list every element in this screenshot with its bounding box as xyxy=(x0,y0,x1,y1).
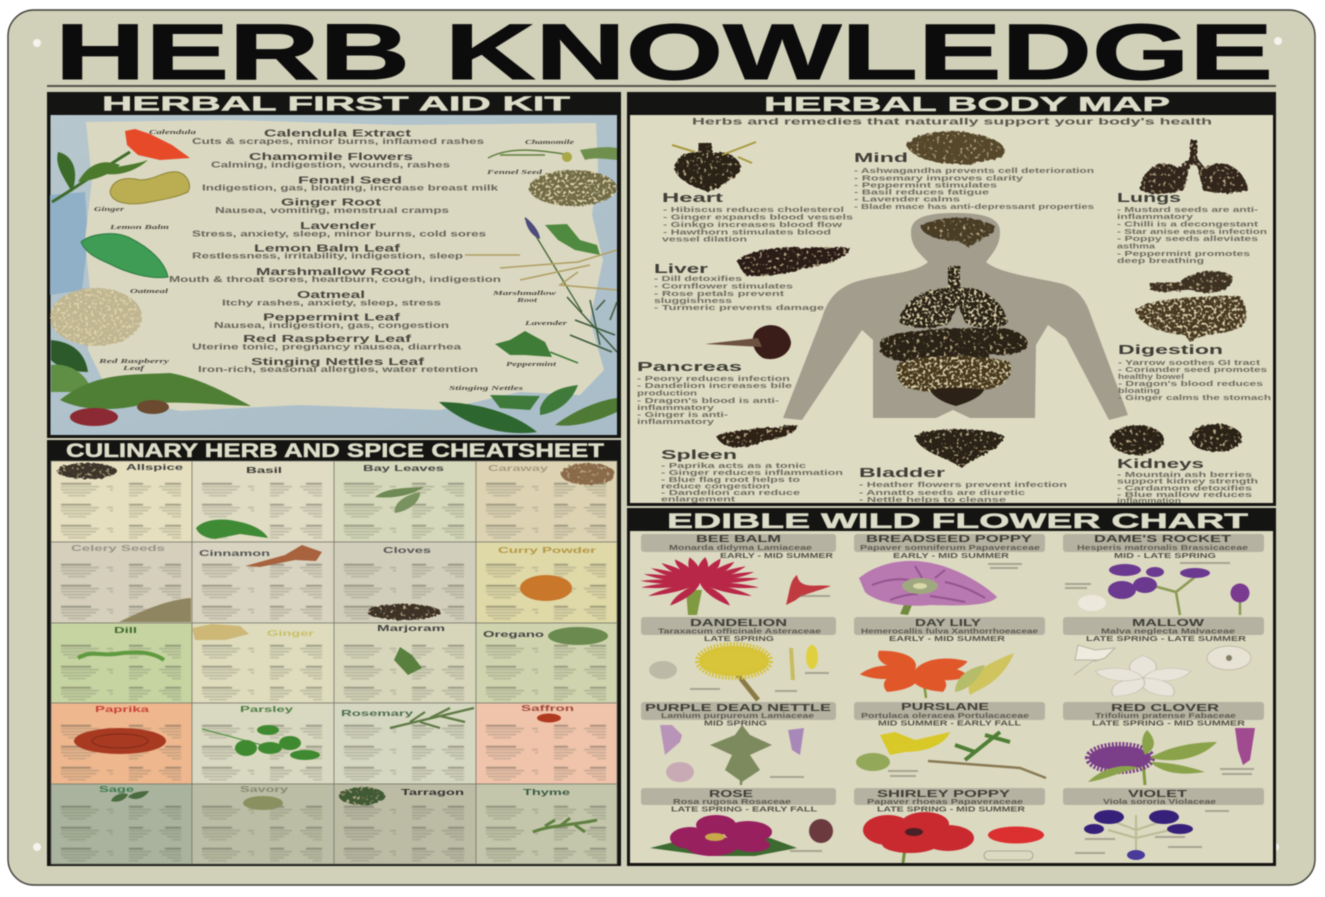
plant captions: Lavender xyxy=(523,321,568,327)
entry: lemon balm: Restlessness, irritability, indigestion, sleep xyxy=(192,252,463,260)
organ: lungs in torso xyxy=(899,266,1008,328)
entry: stinging nettles: Iron-rich, seasonal allergies, water retention xyxy=(198,365,478,374)
flower: shirley poppy: Papaver rhoeas Papaveraceae xyxy=(867,797,1023,806)
cell: cloves xyxy=(334,542,476,623)
plant captions: Lemon Balm xyxy=(108,225,170,231)
cell: oregano xyxy=(476,623,617,703)
text block: bladder: - Annatto seeds are diuretic xyxy=(859,488,1025,497)
cell: tarragon xyxy=(334,784,476,864)
text block: lungs: - Chilli is a decongestant xyxy=(1117,220,1259,228)
illustration: lemon balm leaf xyxy=(81,234,168,278)
flower: violet: VIOLET xyxy=(1128,789,1187,800)
cell: marjoram xyxy=(334,623,476,703)
entry: stinging nettles xyxy=(198,356,478,374)
text block: mind: - Peppermint stimulates xyxy=(854,180,997,190)
illustration: calendula xyxy=(52,129,190,202)
plant captions: Chamomile xyxy=(525,140,575,146)
title: HERB KNOWLEDGE xyxy=(55,7,1273,96)
flower: rose: ROSE xyxy=(709,789,754,800)
panel: culinary herb and spice cheatsheet xyxy=(47,440,621,866)
text block: liver: - Cornflower stimulates xyxy=(654,282,793,290)
entry: marshmallow: Marshmallow Root xyxy=(256,266,411,278)
cell: paprika: Paprika xyxy=(95,704,149,714)
herb list xyxy=(169,128,501,374)
text block: spleen: - Ginger reduces inflammation xyxy=(661,468,844,477)
cell: caraway: Caraway xyxy=(488,463,548,473)
entry: marshmallow: Mouth & throat sores, heartburn, cough, indigestion xyxy=(169,275,501,284)
text block: lungs: inflammatory xyxy=(1117,212,1194,221)
text block: heart: - Hibiscus reduces cholesterol xyxy=(663,205,844,214)
entry: ginger: Nausea, vomiting, menstrual cramps xyxy=(215,206,450,215)
text block: kidneys: support kidney strength xyxy=(1117,476,1259,486)
text block: pancreas: production xyxy=(637,388,698,398)
plant captions: Leaf xyxy=(121,366,146,372)
text block: spleen: - Blue flag root helps to xyxy=(661,475,801,484)
text block: digestion: - Dragon's blood reduces xyxy=(1118,379,1263,388)
entry: calendula xyxy=(192,128,485,146)
plant captions: Fennel Seed xyxy=(487,170,544,176)
organ: stomach, liver and spleen in torso xyxy=(880,328,1028,365)
illustration: stinging nettles xyxy=(439,385,617,433)
text block: digestion: bloating xyxy=(1118,386,1161,395)
text block: spleen: - Dandelion can reduce xyxy=(661,488,800,497)
flower: violet: Viola sororia Violaceae xyxy=(1103,797,1216,806)
flower: rose: LATE SPRING - EARLY FALL xyxy=(671,806,818,814)
text block: pancreas: Pancreas xyxy=(637,360,742,374)
flower: day lily xyxy=(854,617,1045,698)
plant captions: Oatmeal xyxy=(130,289,169,295)
cell: savory: Savory xyxy=(240,784,288,794)
mounting hole: top left xyxy=(33,39,41,47)
flower: purslane: PURSLANE xyxy=(901,702,990,713)
text block: spleen xyxy=(661,448,844,504)
subtitle: Herbs and remedies that naturally support your body's health xyxy=(692,116,1212,128)
flower: dame's rocket: MID - LATE SPRING xyxy=(1114,553,1217,560)
text block: digestion xyxy=(1118,343,1272,402)
entry: fennel: Fennel Seed xyxy=(298,174,402,186)
entry: peppermint xyxy=(214,312,449,330)
flower: dame's rocket: DAME'S ROCKET xyxy=(1094,534,1231,545)
flower: rose xyxy=(641,788,836,856)
heading: herbal body map: HERBAL BODY MAP xyxy=(764,94,1170,116)
panel: edible wild flower chart xyxy=(627,508,1276,866)
cell: rosemary: Rosemary xyxy=(341,708,413,718)
flower: red clover: RED CLOVER xyxy=(1111,703,1220,714)
flower: red clover: Trifolium pratense Fabaceae xyxy=(1095,711,1236,720)
entry: stinging nettles: Stinging Nettles Leaf xyxy=(251,356,425,368)
cell: savory xyxy=(192,784,334,864)
plant captions xyxy=(94,130,575,392)
flower: shirley poppy: SHIRLEY POPPY xyxy=(877,789,1011,800)
text block: mind: Mind xyxy=(854,151,908,165)
text block: heart: - Hawthorn stimulates blood xyxy=(663,228,832,236)
text block: bladder xyxy=(859,466,1068,504)
illustration: fennel seed xyxy=(529,170,617,206)
cell: marjoram: Marjoram xyxy=(377,623,446,633)
flower: breadseed poppy xyxy=(854,534,1045,615)
flower: dandelion: Taraxacum officinale Asteraceae xyxy=(658,626,821,636)
text block: lungs: asthma xyxy=(1117,242,1156,250)
heading: culinary cheatsheet: CULINARY HERB AND SPICE CHEATSHEET xyxy=(66,441,605,462)
flower: shirley poppy: LATE SPRING - MID SUMMER xyxy=(877,806,1025,814)
illustration: lavender and marshmallow root xyxy=(465,217,617,312)
cell: bay leaves: Bay Leaves xyxy=(363,463,444,473)
text block: lungs: deep breathing xyxy=(1117,256,1205,265)
flower: dandelion: LATE SPRING xyxy=(704,636,775,643)
mounting hole: bottom left xyxy=(33,843,41,851)
panel: herbal body map xyxy=(627,92,1276,506)
illustration: peppermint leaf xyxy=(495,331,578,363)
plant captions: Peppermint xyxy=(506,362,557,368)
flower: shirley poppy xyxy=(854,788,1045,863)
illustration: rosemary sprig xyxy=(567,297,617,352)
cell: saffron xyxy=(476,703,617,784)
entry: red raspberry: Uterine tonic, pregnancy nausea, diarrhea xyxy=(192,342,462,352)
plant captions: Stinging Nettles xyxy=(449,386,524,392)
entry: fennel: Indigestion, gas, bloating, increase breast milk xyxy=(202,184,499,192)
flower: mallow: LATE SPRING - LATE SUMMER xyxy=(1086,636,1246,643)
flower: red clover xyxy=(1063,702,1264,785)
entry: lavender: Lavender xyxy=(300,220,376,232)
flower: breadseed poppy: EARLY - MID SUMMER xyxy=(893,553,1009,560)
parchment xyxy=(85,120,604,411)
cell: allspice xyxy=(51,461,192,542)
entry: marshmallow xyxy=(169,266,501,284)
text block: digestion: Digestion xyxy=(1118,343,1223,357)
blue watercolor edge xyxy=(50,192,88,295)
text block: digestion: - Coriander seed promotes xyxy=(1118,365,1267,374)
text block: spleen: reduce congestion xyxy=(661,482,771,490)
cell: paprika xyxy=(51,703,192,784)
cell: allspice: Allspice xyxy=(126,462,183,472)
entry: lavender: Stress, anxiety, sleep, minor burns, cold sores xyxy=(192,230,487,238)
flower: rose: Rosa rugosa Rosaceae xyxy=(673,797,791,806)
text block: pancreas: inflammatory xyxy=(637,417,715,426)
text block: bladder: - Heather flowers prevent infection xyxy=(859,480,1068,489)
flower: day lily: DAY LILY xyxy=(915,618,981,629)
organ: spleen xyxy=(716,425,798,447)
illustration: ginger root xyxy=(110,172,190,204)
cell: basil xyxy=(192,461,334,542)
flower: bee balm xyxy=(640,534,836,615)
entry: lemon balm xyxy=(192,242,463,260)
cell: cloves: Cloves xyxy=(383,545,431,555)
plant captions: Marshmallow xyxy=(491,291,558,297)
text block: liver: - Dill detoxifies xyxy=(654,274,742,283)
text block: kidneys: - Mountain ash berries xyxy=(1117,470,1252,479)
flower: mallow xyxy=(1063,617,1264,700)
entry: ginger xyxy=(215,196,450,215)
flower: purple dead nettle: PURPLE DEAD NETTLE xyxy=(645,703,832,714)
illustration: raspberry leaves xyxy=(51,340,251,426)
organ: kidneys xyxy=(1110,424,1242,455)
flower: dame's rocket: Hesperis matronalis Brassicaceae xyxy=(1077,543,1248,552)
text block: liver xyxy=(654,262,824,312)
text block: liver: - Turmeric prevents damage xyxy=(654,303,824,312)
cell: cinnamon xyxy=(192,542,334,623)
organ: bladder xyxy=(915,429,1004,468)
entry: chamomile: Calming, indigestion, wounds, rashes xyxy=(211,160,451,170)
text block: bladder: Bladder xyxy=(859,466,945,480)
text block: mind xyxy=(854,151,1095,211)
text block: mind: - Lavender calms xyxy=(854,194,960,204)
text block: pancreas: - Dragon's blood is anti- xyxy=(637,396,780,405)
text block: pancreas: inflammatory xyxy=(637,403,715,412)
organ: bladder in torso xyxy=(930,388,984,406)
organ: mind brain xyxy=(906,131,1005,165)
text block: heart: - Ginger expands blood vessels xyxy=(663,212,853,222)
mounting hole: top right xyxy=(1274,37,1282,45)
text block: liver: sluggishness xyxy=(654,296,732,305)
text block: lungs: - Poppy seeds alleviates xyxy=(1117,234,1258,243)
text block: kidneys: - Blue mallow reduces xyxy=(1117,490,1252,499)
text block: heart: vessel dilation xyxy=(662,234,748,244)
organ: lungs xyxy=(1140,140,1248,194)
cell: sage: Sage xyxy=(99,784,134,794)
text block: pancreas: - Dandelion increases bile xyxy=(637,381,792,390)
flower: mallow: MALLOW xyxy=(1132,618,1205,629)
flower: purple dead nettle: MID SPRING xyxy=(704,720,768,728)
text block: mind: - Blade mace has anti-depressant properties xyxy=(854,202,1094,211)
text block: pancreas: - Peony reduces infection xyxy=(637,374,791,383)
text block: lungs: - Peppermint promotes xyxy=(1117,249,1250,258)
cell: dill: Dill xyxy=(114,625,137,635)
text block: kidneys: - Cardamom detoxifies xyxy=(1117,484,1252,492)
heading: edible wild flower chart: EDIBLE WILD FLOWER CHART xyxy=(667,510,1248,533)
entry: fennel xyxy=(202,174,499,192)
entry: red raspberry: Red Raspberry Leaf xyxy=(243,333,412,345)
plant captions: Calendula xyxy=(149,130,196,136)
flower: dandelion xyxy=(641,617,836,700)
flower: purslane: Portulaca oleracea Portulacaceae xyxy=(861,711,1029,720)
cell: saffron: Saffron xyxy=(521,703,574,713)
entry: peppermint: Peppermint Leaf xyxy=(263,312,401,324)
text block: lungs: Lungs xyxy=(1117,191,1181,205)
cell: celery seeds: Celery Seeds xyxy=(71,543,165,553)
text block: bladder: - Nettle helps to cleanse xyxy=(859,495,1006,504)
cell: parsley: Parsley xyxy=(240,704,293,714)
plant captions: Red Raspberry xyxy=(97,359,170,365)
mounting hole: bottom right xyxy=(1271,843,1279,851)
text block: digestion: - Ginger calms the stomach xyxy=(1118,393,1272,402)
entry: calendula: Cuts & scrapes, minor burns, inflamed rashes xyxy=(192,137,485,146)
text block: liver: Liver xyxy=(654,262,708,276)
plant captions: Ginger xyxy=(94,207,125,213)
text block: pancreas xyxy=(637,360,792,426)
cell: cinnamon: Cinnamon xyxy=(199,548,270,558)
text block: spleen: - Paprika acts as a tonic xyxy=(661,461,806,470)
cell: tarragon: Tarragon xyxy=(401,787,464,797)
text block: liver: - Rose petals prevent xyxy=(654,289,785,298)
cell: rosemary xyxy=(334,703,476,784)
organ: digestion xyxy=(1135,271,1246,342)
title rule xyxy=(47,85,1276,87)
entry: peppermint: Nausea, indigestion, gas, congestion xyxy=(214,321,449,330)
entry: red raspberry xyxy=(192,333,462,352)
flower: purple dead nettle: Lamium purpureum Lamiaceae xyxy=(661,711,814,720)
text block: heart: - Ginkgo increases blood flow xyxy=(663,220,842,229)
entry: chamomile: Chamomile Flowers xyxy=(249,151,413,163)
text block: lungs xyxy=(1117,191,1268,265)
flower: breadseed poppy: Papaver somniferum Papaveraceae xyxy=(860,543,1040,552)
cell: bay leaves xyxy=(334,461,476,542)
text block: mind: - Rosemary improves clarity xyxy=(854,174,1024,182)
text block: heart xyxy=(662,191,853,244)
cell: parsley xyxy=(192,703,334,784)
flower: mallow: Malva neglecta Malvaceae xyxy=(1101,626,1235,636)
illustration: oatmeal xyxy=(50,288,142,346)
entry: lemon balm: Lemon Balm Leaf xyxy=(254,242,401,254)
text block: lungs: - Mustard seeds are anti- xyxy=(1117,205,1259,214)
cell: oregano: Oregano xyxy=(483,629,544,639)
flower: bee balm: EARLY - MID SUMMER xyxy=(720,553,833,560)
text block: digestion: - Yarrow soothes GI tract xyxy=(1118,358,1261,367)
entry: ginger: Ginger Root xyxy=(281,196,382,208)
text block: kidneys: Kidneys xyxy=(1117,457,1204,471)
cell: ginger xyxy=(192,623,334,703)
text block: pancreas: - Ginger is anti- xyxy=(637,410,729,419)
text block: lungs: - Star anise eases infection xyxy=(1117,227,1268,236)
cell: thyme: Thyme xyxy=(523,787,570,797)
text block: mind: - Ashwagandha prevents cell deterioration xyxy=(854,166,1095,175)
flower: purple dead nettle xyxy=(641,702,836,785)
organ: pancreas xyxy=(705,325,791,359)
flower: day lily: Hemerocallis fulva Xanthorrhoeaceae xyxy=(861,626,1038,636)
organ: intestines in torso xyxy=(897,356,1011,393)
flower: purslane: MID SUMMER - EARLY FALL xyxy=(878,720,1022,728)
entry: oatmeal xyxy=(222,289,442,308)
text block: kidneys: inflammation xyxy=(1117,496,1182,505)
panel: herbal first aid kit xyxy=(47,92,621,438)
text block: mind: - Basil reduces fatigue xyxy=(854,188,989,196)
text block: heart: Heart xyxy=(662,191,725,205)
organ: brain in head xyxy=(920,218,995,247)
illustration: chamomile xyxy=(488,147,617,162)
organ: liver xyxy=(737,247,850,276)
organ: heart xyxy=(672,142,756,192)
flower: dame's rocket xyxy=(1063,534,1264,615)
flower: violet xyxy=(1063,788,1264,860)
flower: purslane xyxy=(854,702,1046,778)
flower: red clover: LATE SPRING - MID SUMMER xyxy=(1092,720,1245,728)
body silhouette xyxy=(783,213,1128,420)
entry: oatmeal: Itchy rashes, anxiety, sleep, stress xyxy=(222,298,442,308)
flower: bee balm: BEE BALM xyxy=(696,534,781,545)
text block: spleen: Spleen xyxy=(661,448,737,462)
entry: calendula: Calendula Extract xyxy=(264,128,412,140)
plant captions: Root xyxy=(515,298,538,304)
cell: thyme xyxy=(476,784,617,864)
text block: kidneys xyxy=(1117,457,1259,505)
cell: celery seeds xyxy=(51,542,192,623)
flower: dandelion: DANDELION xyxy=(690,618,787,629)
cell: dill xyxy=(51,623,192,703)
cell: basil: Basil xyxy=(246,465,282,475)
text block: digestion: healthy bowel xyxy=(1118,372,1184,381)
flower: breadseed poppy: BREADSEED POPPY xyxy=(866,534,1033,545)
flower: bee balm: Monarda didyma Lamiaceae xyxy=(669,543,812,552)
cell: caraway xyxy=(476,461,617,542)
cell: curry powder xyxy=(476,542,617,623)
flower: day lily: EARLY - MID SUMMER xyxy=(889,636,1005,643)
entry: oatmeal: Oatmeal xyxy=(297,289,365,301)
cell: curry powder: Curry Powder xyxy=(498,545,597,555)
cell: ginger: Ginger xyxy=(267,628,315,638)
cell: sage xyxy=(51,784,192,864)
entry: lavender xyxy=(192,220,487,238)
entry: chamomile xyxy=(211,151,451,170)
text block: spleen: enlargement xyxy=(661,494,736,504)
heading: herbal first aid kit: HERBAL FIRST AID KIT xyxy=(102,94,570,116)
